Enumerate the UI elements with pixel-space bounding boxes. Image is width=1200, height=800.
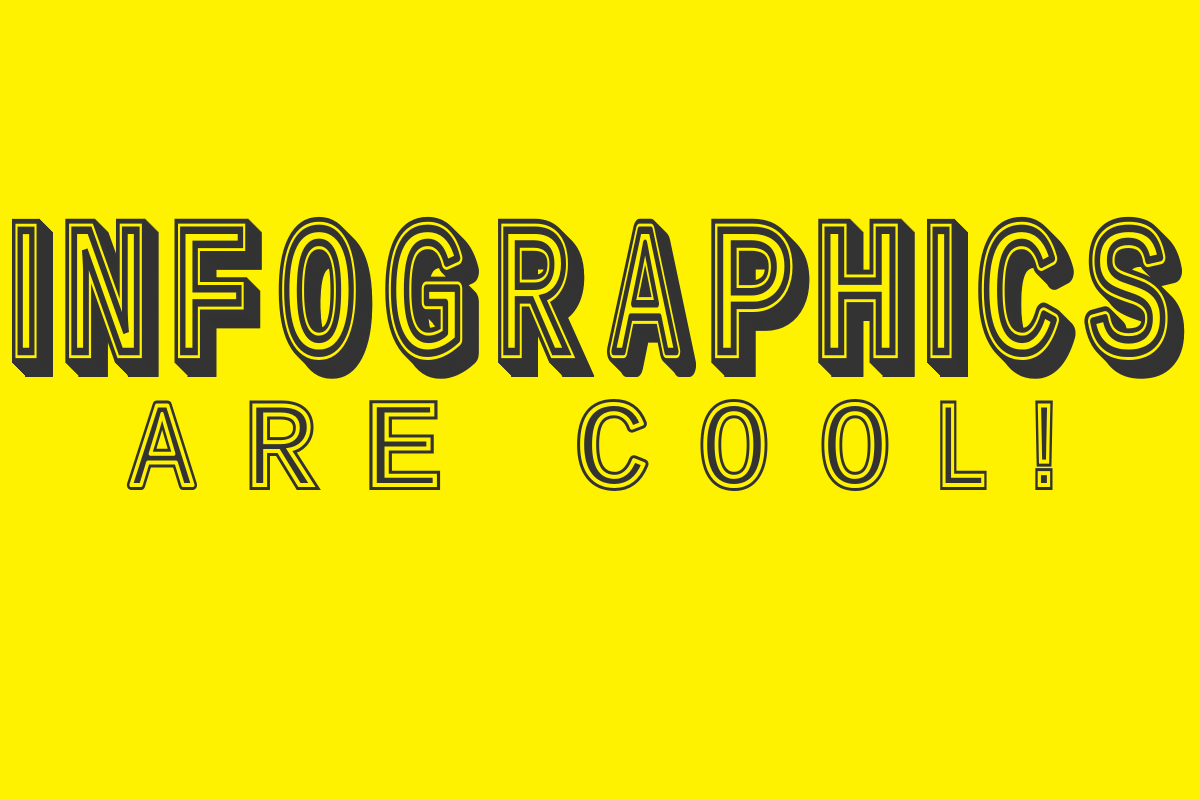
subheading yellow inline: !	[1015, 385, 1073, 521]
heading yellow inline	[9, 194, 1169, 408]
heading outer line with extruded shadow: I	[9, 194, 43, 390]
heading centre line: R	[496, 200, 570, 408]
heading centre line: A	[614, 198, 677, 407]
heading centre line: G	[386, 200, 466, 408]
heading yellow inline: H	[816, 199, 904, 408]
heading centre line: P	[709, 199, 795, 407]
heading yellow inline: O	[280, 199, 358, 407]
heading centre line: S	[1088, 198, 1169, 407]
heading yellow inline: F	[170, 200, 250, 408]
heading outer line with extruded shadow: G	[386, 200, 466, 408]
subheading: ARE COOL!	[131, 384, 1073, 522]
heading outer line with extruded shadow: I	[924, 194, 958, 390]
subheading yellow inline: R	[245, 384, 315, 522]
heading outer line with extruded shadow: P	[709, 199, 795, 407]
subheading outer line: E	[365, 385, 441, 522]
subheading yellow inline: C	[575, 385, 649, 522]
subheading outer line: C	[575, 385, 649, 522]
heading centre line: F	[170, 200, 250, 408]
subheading outer line: O	[700, 386, 768, 522]
heading yellow inline: P	[709, 199, 795, 407]
heading yellow inline: N	[63, 199, 148, 408]
subheading yellow inline: L	[933, 386, 989, 522]
heading yellow inline: S	[1088, 198, 1169, 407]
subheading yellow inline: A	[131, 385, 193, 522]
heading centre line: H	[816, 199, 904, 408]
subheading outer line: A	[131, 385, 193, 522]
subheading outer line	[131, 384, 1073, 522]
heading: INFOGRAPHICS	[9, 194, 1169, 408]
subheading yellow inline: O	[821, 386, 889, 522]
heading outer line with extruded shadow: A	[614, 198, 677, 407]
heading centre line: C	[979, 200, 1060, 407]
subheading yellow inline	[131, 384, 1073, 522]
subheading outer line: !	[1015, 385, 1073, 521]
heading centre line: I	[9, 194, 43, 390]
heading outer line with extruded shadow: S	[1088, 198, 1169, 407]
heading outer line with extruded shadow: C	[979, 200, 1060, 407]
heading yellow inline: R	[496, 200, 570, 408]
heading outer line with extruded shadow	[9, 194, 1169, 408]
heading yellow inline: I	[924, 194, 958, 390]
heading centre line	[9, 194, 1169, 408]
heading yellow inline: I	[9, 194, 43, 390]
heading outer line with extruded shadow: N	[63, 199, 148, 408]
heading outer line with extruded shadow: H	[816, 199, 904, 408]
heading centre line: O	[280, 199, 358, 407]
heading outer line with extruded shadow: O	[280, 199, 358, 407]
heading outer line with extruded shadow: F	[170, 200, 250, 408]
heading yellow inline: G	[386, 200, 466, 408]
heading outer line with extruded shadow: R	[496, 200, 570, 408]
subheading outer line: L	[933, 386, 989, 522]
subheading outer line: R	[245, 384, 315, 522]
heading yellow inline: C	[979, 200, 1060, 407]
heading yellow inline: A	[614, 198, 677, 407]
heading centre line: N	[63, 199, 148, 408]
subheading yellow inline: O	[700, 386, 768, 522]
subheading yellow inline: E	[365, 385, 441, 522]
heading centre line: I	[924, 194, 958, 390]
subheading outer line: O	[821, 386, 889, 522]
